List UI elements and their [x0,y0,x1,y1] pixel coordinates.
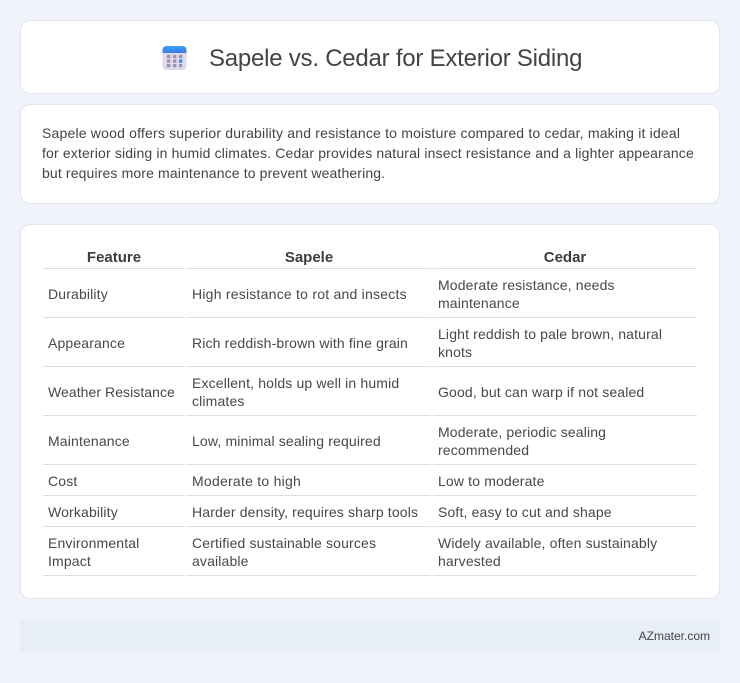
row: maintenance: Maintenance [48,433,130,449]
comparison table [43,249,697,576]
row: durability: maintenance [438,295,520,311]
row: workability: Workability [48,504,118,520]
row: environmental impact: Certified sustainable sources [192,535,376,551]
row: durability: High resistance to rot and insects [192,286,407,302]
row: workability: Harder density, requires sharp tools [192,504,418,520]
icon: calendar [162,46,186,70]
row: maintenance: recommended [438,442,529,458]
row: environmental impact: Widely available, often sustainably [438,535,657,551]
row: weather resistance: Excellent, holds up well in humid [192,375,399,391]
row: appearance: Appearance [48,335,125,351]
row: environmental impact: Environmental [48,535,139,551]
table header row: Feature [87,249,141,266]
row: environmental impact: available [192,553,249,569]
title: Sapele vs. Cedar for Exterior Siding [209,45,582,72]
row: weather resistance: climates [192,393,245,409]
intro paragraph: Sapele wood offers superior durability and resistance to moisture compared to cedar, making it ideal [42,125,680,141]
row: weather resistance [43,375,697,416]
row: weather resistance: Good, but can warp if not sealed [438,384,644,400]
row: appearance [43,326,697,367]
table header row [43,249,697,269]
row: workability [43,504,697,527]
footer brand: AZmater.com [639,629,710,643]
row: weather resistance: Weather Resistance [48,384,175,400]
header panel [20,20,720,94]
row: appearance: Rich reddish-brown with fine grain [192,335,408,351]
row: cost [43,473,697,496]
row: maintenance [43,424,697,465]
row: durability [43,277,697,318]
row: durability: Moderate resistance, needs [438,277,615,293]
row: appearance: knots [438,344,472,360]
row: cost: Moderate to high [192,473,301,489]
row: durability: Durability [48,286,108,302]
row: appearance: Light reddish to pale brown, natural [438,326,662,342]
row: environmental impact: harvested [438,553,501,569]
row: maintenance: Moderate, periodic sealing [438,424,606,440]
row: environmental impact: Impact [48,553,91,569]
intro paragraph: but requires more maintenance to prevent weathering. [42,165,385,181]
table header row: Sapele [285,249,333,266]
intro paragraph [42,125,694,181]
table header row: Cedar [544,249,586,266]
footer bar [20,619,720,653]
row: cost: Cost [48,473,77,489]
row: environmental impact [43,535,697,576]
comparison table panel [20,224,720,599]
intro paragraph: for exterior siding in humid climates. Cedar provides natural insect resistance and a lighter appearance [42,145,694,161]
row: workability: Soft, easy to cut and shape [438,504,612,520]
row: maintenance: Low, minimal sealing required [192,433,381,449]
intro text panel [20,104,720,204]
row: cost: Low to moderate [438,473,545,489]
